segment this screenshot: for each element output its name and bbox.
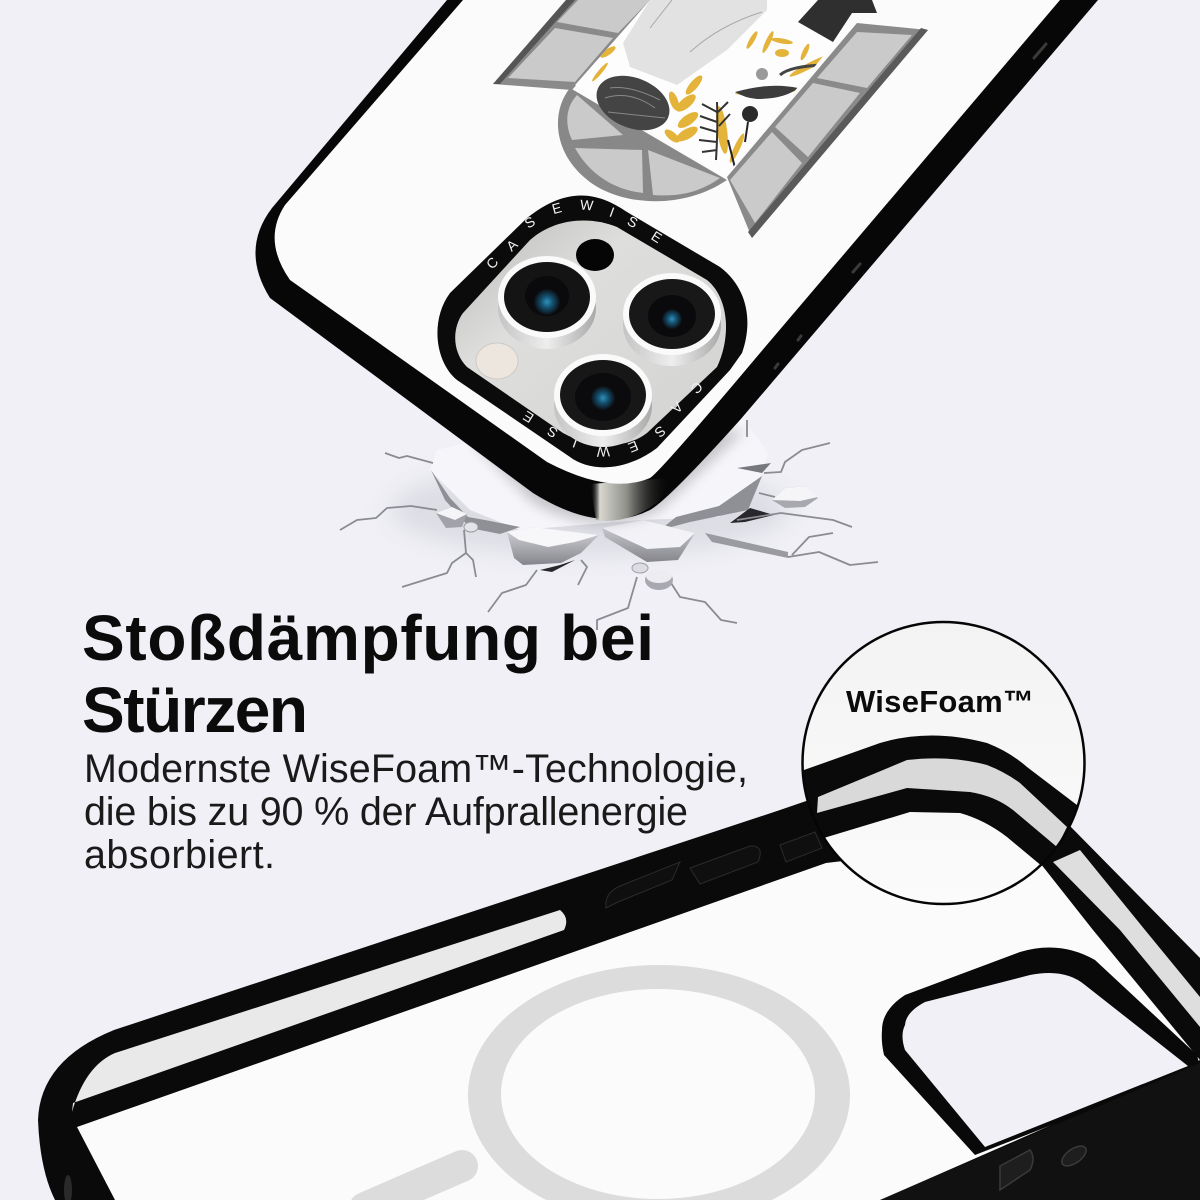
body text: die bis zu 90 % der Aufprallenergie xyxy=(84,790,688,834)
magsafe ring xyxy=(468,965,850,1200)
hat xyxy=(798,0,877,42)
body text: absorbiert. xyxy=(84,833,275,877)
side button marks xyxy=(775,44,1046,368)
lens right xyxy=(623,273,721,366)
camera plate silver xyxy=(455,220,726,445)
rock chunk centre xyxy=(602,520,695,562)
magnified case edge xyxy=(804,736,1077,864)
rock chunk left xyxy=(507,527,599,565)
open case, inside view xyxy=(38,755,1200,1200)
magnifier background xyxy=(802,622,1084,904)
magnifier outline xyxy=(802,622,1084,904)
brand text ring xyxy=(483,196,706,460)
artwork: window illustration xyxy=(493,0,928,238)
big cracked plate xyxy=(430,420,768,530)
cracked ground impact xyxy=(340,420,878,630)
small rock right xyxy=(772,486,818,508)
heading: Stoßdämpfung bei xyxy=(82,602,654,674)
small rock bottom xyxy=(632,563,673,590)
body text xyxy=(84,747,748,877)
foam strip right xyxy=(1053,850,1200,1027)
heading: Stürzen xyxy=(82,674,308,746)
flash xyxy=(476,343,518,379)
bumper corner highlight xyxy=(590,478,672,521)
case black frame xyxy=(38,755,1200,1200)
microphone hole xyxy=(576,239,614,271)
camera cutout frame xyxy=(882,948,1200,1155)
camera surround xyxy=(437,195,747,467)
plate broken edges xyxy=(431,470,762,534)
magnifier circle: WiseFoam detail xyxy=(790,622,1090,904)
dark leaf xyxy=(735,86,798,99)
bottom ports xyxy=(1000,1142,1089,1190)
left window wing xyxy=(493,0,650,90)
crack lines xyxy=(340,420,878,630)
white case back xyxy=(275,0,1060,484)
dark shell bag xyxy=(588,66,678,140)
bottom frame band xyxy=(880,1063,1200,1200)
heading xyxy=(82,602,654,746)
lens top left xyxy=(498,256,596,349)
camera ring black xyxy=(437,195,747,467)
lens bottom xyxy=(554,354,652,447)
fern xyxy=(699,102,730,160)
window opening with figure and plants xyxy=(575,0,823,166)
case buttons xyxy=(606,832,822,908)
yellow leaves xyxy=(591,30,830,164)
semicircle window xyxy=(558,88,727,201)
left side port xyxy=(64,1175,72,1200)
soft phone shadow xyxy=(470,430,745,523)
top phone with case xyxy=(255,0,1098,523)
body text: Modernste WiseFoam™-Technologie, xyxy=(84,747,748,791)
clear back panel xyxy=(77,840,1200,1200)
right window wing xyxy=(727,23,928,238)
dark wedge in crack xyxy=(540,508,774,572)
small rock left xyxy=(436,507,478,532)
black bumper xyxy=(255,0,1098,519)
foam strip left xyxy=(72,910,566,1112)
camera cutout xyxy=(902,973,1188,1147)
magnifier label: WiseFoam™ xyxy=(846,684,1034,719)
magnified foam strip xyxy=(817,758,1067,847)
brand text top: CASEWISE xyxy=(483,196,665,272)
figure dress xyxy=(623,0,767,85)
brand text bottom: CASEWISE xyxy=(520,379,706,460)
magsafe bar xyxy=(365,1166,462,1200)
dark flower xyxy=(742,106,758,122)
